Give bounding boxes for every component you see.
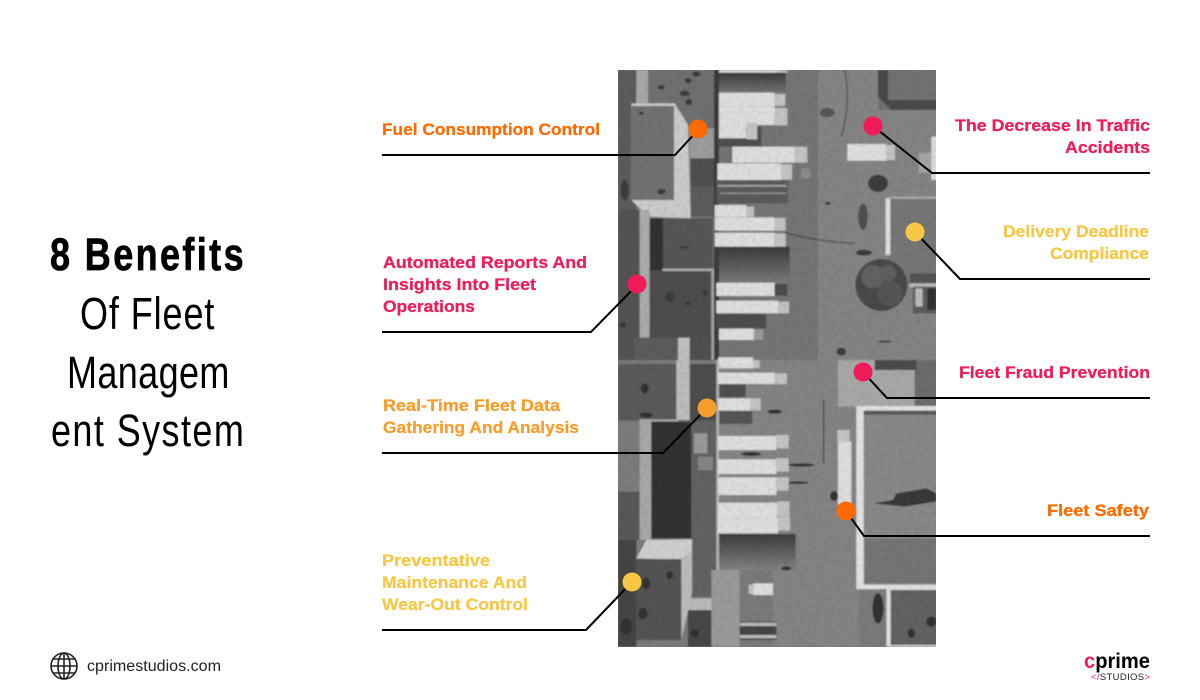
label: preventative maintenance: Preventative [382, 551, 490, 570]
aerial photo of truck depot [618, 70, 938, 647]
label: decrease in traffic accidents [955, 116, 1150, 157]
logo: cprime studios: cprime [1084, 650, 1150, 673]
title: Of Fleet [80, 288, 215, 339]
label: real-time data: Gathering And Analysis [383, 418, 579, 437]
label: fleet safety: Fleet Safety [1047, 501, 1150, 520]
label: automated reports: Operations [383, 297, 475, 316]
title: 8 Benefits [50, 229, 244, 280]
title: Managem [67, 347, 229, 398]
icon: globe [51, 653, 77, 679]
title: ent System [51, 405, 244, 456]
label: decrease in traffic accidents: The Decrease In Traffic [955, 116, 1150, 135]
title [50, 229, 244, 456]
label: real-time data: Real-Time Fleet Data [383, 396, 561, 415]
label: delivery deadline compliance: Compliance [1050, 244, 1149, 263]
logo: cprime studios: </STUDIOS> [1091, 672, 1150, 683]
label: real-time data [383, 396, 579, 437]
label: preventative maintenance [382, 551, 528, 614]
parked trucks, lower half [718, 360, 851, 595]
connector lines [382, 126, 1150, 630]
logo: cprime studios [1084, 650, 1150, 683]
label: preventative maintenance: Maintenance And [382, 573, 527, 592]
label: fleet fraud prevention: Fleet Fraud Prevention [959, 363, 1150, 382]
label: preventative maintenance: Wear-Out Control [382, 595, 528, 614]
label: delivery deadline compliance [1003, 222, 1149, 263]
marker dots [622, 116, 924, 592]
label: automated reports [383, 253, 587, 316]
parked trucks, upper half [715, 70, 936, 360]
label: decrease in traffic accidents: Accidents [1065, 138, 1150, 157]
website url: cprimestudios.com [87, 658, 221, 675]
label: automated reports: Automated Reports And [383, 253, 587, 272]
label: delivery deadline compliance: Delivery Deadline [1003, 222, 1149, 241]
label: automated reports: Insights Into Fleet [383, 275, 536, 294]
label: fuel consumption control: Fuel Consumption Control [382, 120, 600, 139]
